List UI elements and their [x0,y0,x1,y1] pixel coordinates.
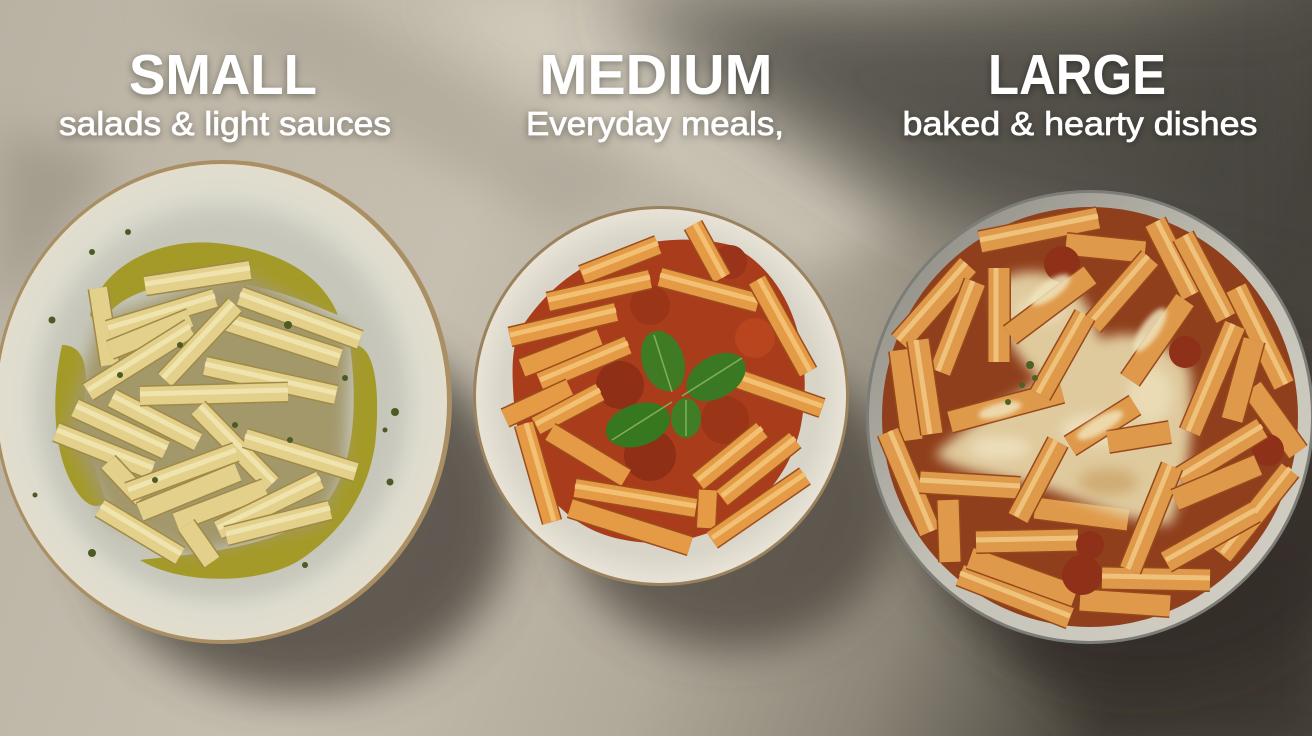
column: small portion [0,160,452,644]
penne: large bottom layer [888,216,1298,618]
penne: small [56,268,360,562]
tomato sauce [513,240,805,543]
sauce spots [1044,246,1284,595]
headings [59,43,1258,142]
herbs: large [1005,361,1038,405]
pasta shadow base [65,270,350,555]
bowl: large [866,190,1312,644]
subtitle: medium: Everyday meals, [526,105,784,142]
melted cheese [935,272,1192,525]
herbs: small [32,229,399,568]
title: medium: MEDIUM [540,43,772,107]
olive oil [55,242,377,579]
penne: large top layer [916,256,1262,570]
penne: medium [505,224,822,546]
plate: medium [473,206,849,586]
icon: basil [600,325,754,455]
title: large: LARGE [988,43,1166,107]
title: small: SMALL [129,43,317,107]
shadows under the dishes [85,315,1312,695]
subtitle: small: salads & light sauces [59,105,391,142]
plate: small [0,160,452,644]
subtitle: large: baked & hearty dishes [902,105,1258,142]
column: large portion [866,190,1312,644]
column: medium portion [473,206,849,586]
cheese smears over penne [977,269,1172,445]
